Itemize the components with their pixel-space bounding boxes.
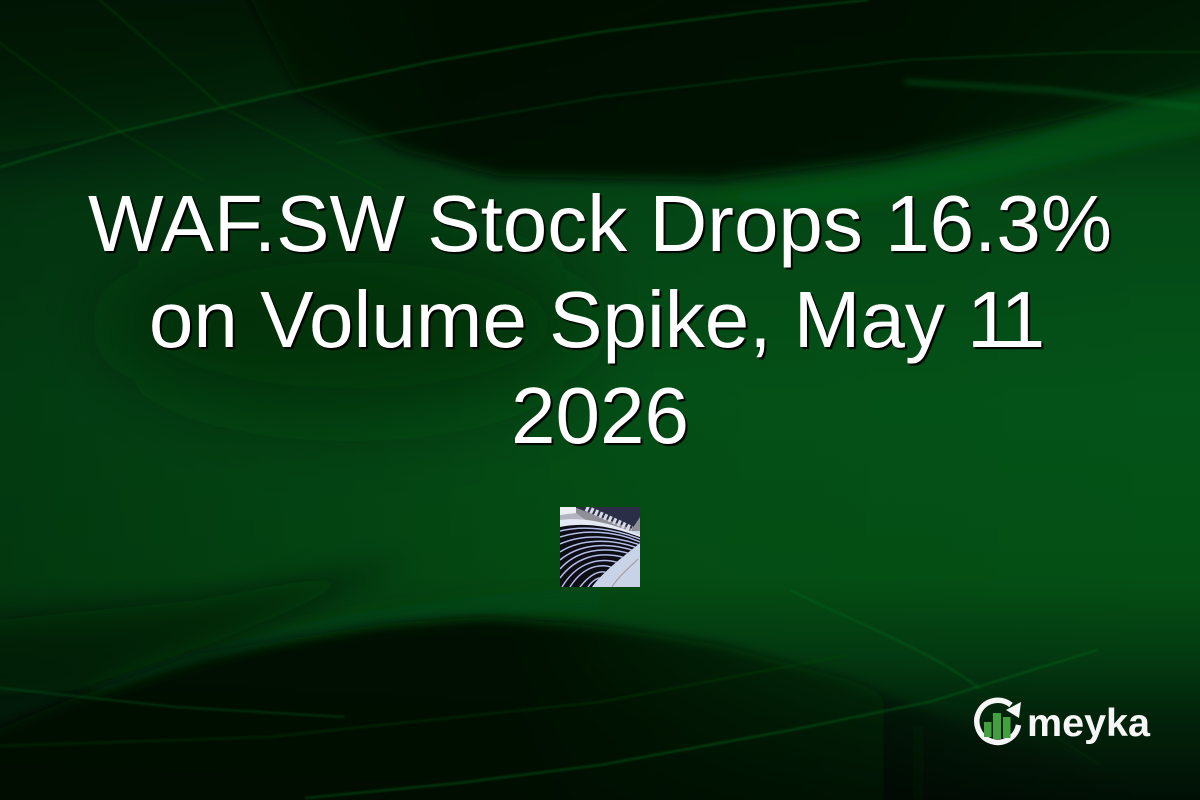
bottom dark wave xyxy=(0,617,1200,800)
bright swoosh under top wave xyxy=(700,86,1200,210)
title: on Volume Spike, May 11 xyxy=(149,275,1045,364)
logo: meyka xyxy=(974,698,1150,746)
lower-left shade xyxy=(0,560,413,700)
title: WAF.SW Stock Drops 16.3% xyxy=(88,179,1112,268)
title: 2026 xyxy=(511,371,689,460)
soft darker patch, centre left xyxy=(110,235,590,415)
icon: circular arrow with bars xyxy=(977,700,1021,742)
bright swoosh over bottom wave xyxy=(76,587,600,693)
thumbnail: ribbed metal cylinder photo xyxy=(560,507,640,587)
soft shading above the top streak xyxy=(0,0,900,170)
top dark wave xyxy=(230,0,1200,180)
title xyxy=(88,179,1112,460)
wordmark: meyka xyxy=(1027,702,1150,745)
